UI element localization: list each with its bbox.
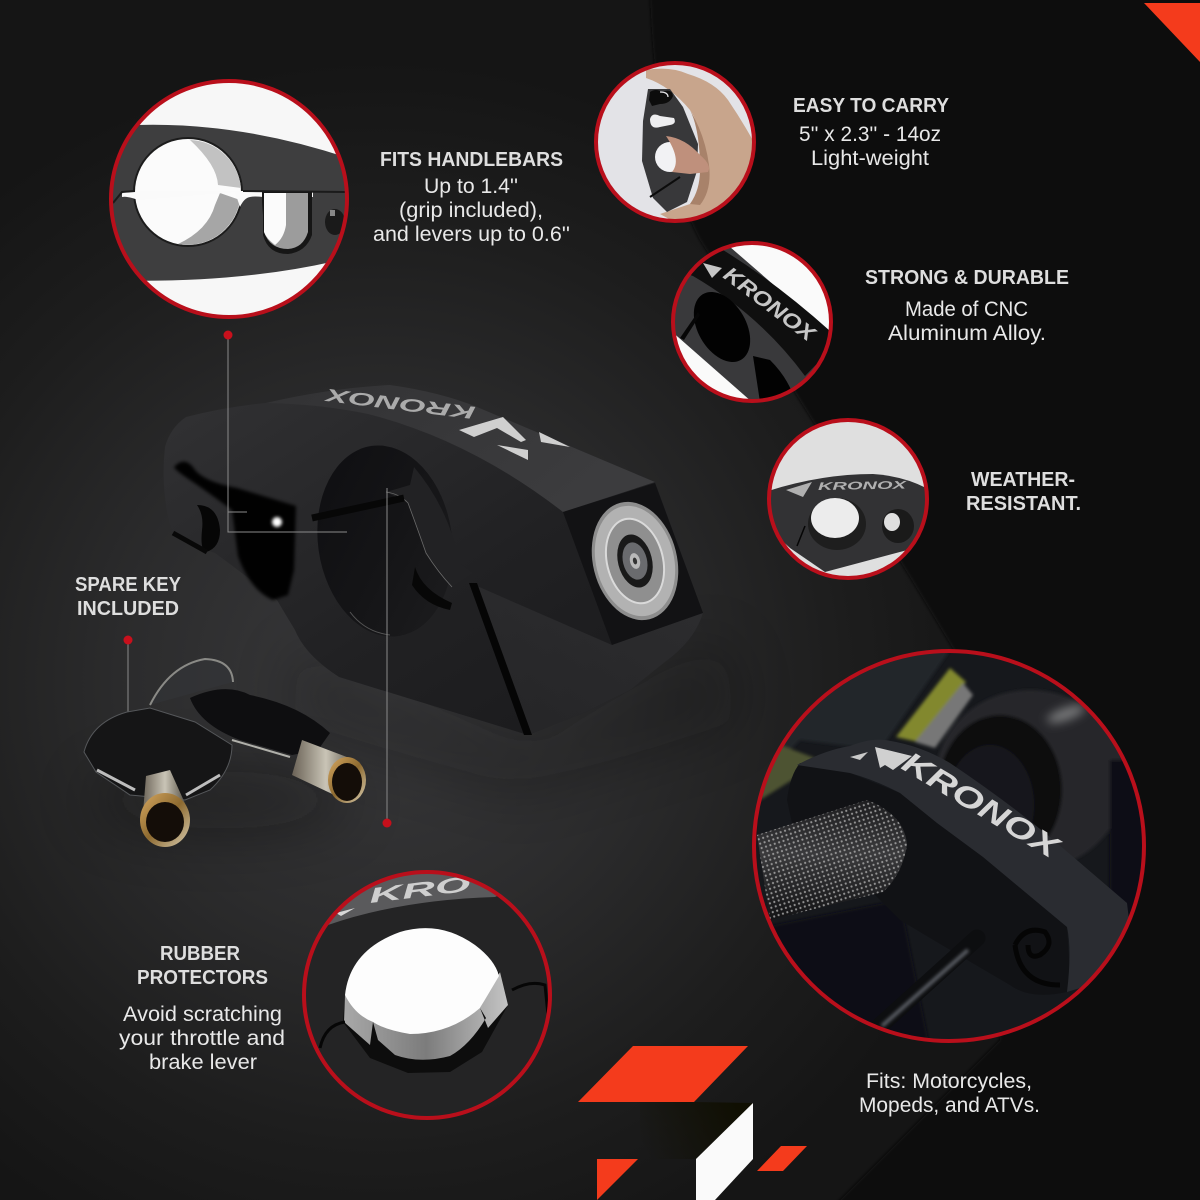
- end face with keyway: [563, 483, 703, 645]
- panel: weather resistant photo: [765, 415, 935, 585]
- heading: spare key: [75, 574, 182, 620]
- corner accent triangle: [1144, 3, 1200, 62]
- blurred background: [762, 653, 1142, 1038]
- handlebar hole: [305, 437, 473, 645]
- text: rubber protectors detail: brake lever: [149, 1051, 257, 1074]
- front key head: [84, 708, 232, 800]
- cylinder highlight: [1045, 702, 1087, 726]
- top band: [328, 874, 497, 925]
- key ring: [150, 659, 233, 705]
- heading: strong and durable: STRONG & DURABLE: [865, 267, 1069, 289]
- split line: [320, 983, 548, 1048]
- hand: [646, 69, 758, 225]
- holes: [694, 292, 750, 362]
- white backdrop top: [731, 245, 829, 330]
- heading: weather resistant: RESISTANT.: [966, 493, 1081, 515]
- hook slot: [649, 90, 673, 106]
- text: carry spec: Light-weight: [811, 147, 929, 170]
- lock face: [790, 763, 994, 902]
- text: material: Made of CNC: [905, 298, 1028, 321]
- lower chamfer: [470, 583, 703, 735]
- front key barrel: [142, 770, 188, 825]
- glint: [272, 517, 282, 527]
- lock body front face: [164, 385, 703, 735]
- lock plate: [765, 474, 930, 572]
- big hole: [133, 137, 243, 247]
- key shadow: [90, 770, 350, 830]
- logo text: KRONOX: [719, 263, 821, 347]
- heading: spare key: SPARE KEY: [75, 574, 182, 596]
- brake lever: [914, 950, 966, 1002]
- text: handlebar spec: [373, 175, 570, 246]
- product: main grip lock: [164, 384, 740, 790]
- heading: weather resistant: [966, 469, 1081, 515]
- heading: fits handlebars: FITS HANDLEBARS: [380, 149, 563, 171]
- white backdrop bottom: [676, 335, 748, 399]
- text: handlebar spec: (grip included),: [399, 199, 543, 222]
- text: material: [888, 298, 1046, 345]
- lever notch: [262, 192, 312, 254]
- panel: strong and durable photo: [670, 240, 840, 405]
- text: handlebar spec: and levers up to 0.6'': [373, 223, 570, 246]
- KRONOX logo on top band: [322, 384, 570, 460]
- lever slot and hook: [173, 462, 296, 600]
- panel: easy to carry photo: [590, 60, 760, 225]
- small hook hole: [325, 209, 345, 235]
- lock plate: [100, 125, 348, 281]
- heading: weather resistant: WEATHER-: [971, 469, 1075, 491]
- text: compatible vehicles: Fits: Motorcycles,: [866, 1070, 1032, 1093]
- text: rubber protectors detail: your throttle and: [119, 1027, 285, 1050]
- lock plate: [642, 89, 698, 212]
- inner sleeve grey: [344, 972, 508, 1060]
- text: rubber protectors detail: Avoid scratching: [123, 1003, 282, 1026]
- rear key barrel: [292, 740, 360, 800]
- big hole with finger: [655, 142, 676, 172]
- logo text: KRO: [368, 873, 472, 908]
- brand graphic: geometric shapes: [578, 1046, 807, 1200]
- callout lines: [124, 330, 392, 828]
- heading: rubber protectors: [137, 943, 268, 989]
- horizontal gap: [122, 191, 313, 207]
- text: material: Aluminum Alloy.: [888, 322, 1046, 345]
- small hole: [650, 115, 675, 128]
- text: rubber protectors detail: [119, 1003, 285, 1074]
- text: compatible vehicles: [859, 1070, 1040, 1117]
- panel: installed on motorcycle photo: [750, 650, 1160, 1050]
- text: compatible vehicles: Mopeds, and ATVs.: [859, 1094, 1040, 1117]
- heading: rubber protectors: RUBBER: [160, 943, 241, 965]
- text: handlebar spec: Up to 1.4'': [424, 175, 518, 198]
- product: spare keys: [84, 659, 366, 847]
- grip: [757, 800, 907, 902]
- logo text: KRONOX: [818, 479, 907, 493]
- lock shadow: [290, 640, 740, 790]
- heading: rubber protectors: PROTECTORS: [137, 967, 268, 989]
- panel: installed on motorcycle photo: KRONOX: [896, 746, 1067, 866]
- hook detail: [1015, 930, 1060, 985]
- text: carry spec: 5'' x 2.3'' - 14oz: [799, 123, 941, 146]
- lock top band: [266, 385, 655, 512]
- large hole: [808, 498, 866, 550]
- split line and slit: [312, 498, 532, 735]
- lock band: [797, 740, 1132, 992]
- rim: [343, 972, 508, 1073]
- rear key head: [190, 689, 330, 755]
- small hole: [882, 509, 914, 543]
- text: carry spec: [799, 123, 941, 170]
- heading: spare key: INCLUDED: [77, 598, 179, 620]
- panel: fits handlebars photo: [109, 79, 349, 319]
- lock cylinder: [580, 493, 690, 629]
- top band: [691, 250, 829, 376]
- heading: easy to carry: EASY TO CARRY: [793, 95, 950, 117]
- panel: rubber protectors photo: [302, 870, 552, 1120]
- KRONOX logo: [850, 752, 868, 760]
- KRONOX logo on top band: KRONOX: [322, 384, 477, 422]
- white opening: [345, 928, 499, 1034]
